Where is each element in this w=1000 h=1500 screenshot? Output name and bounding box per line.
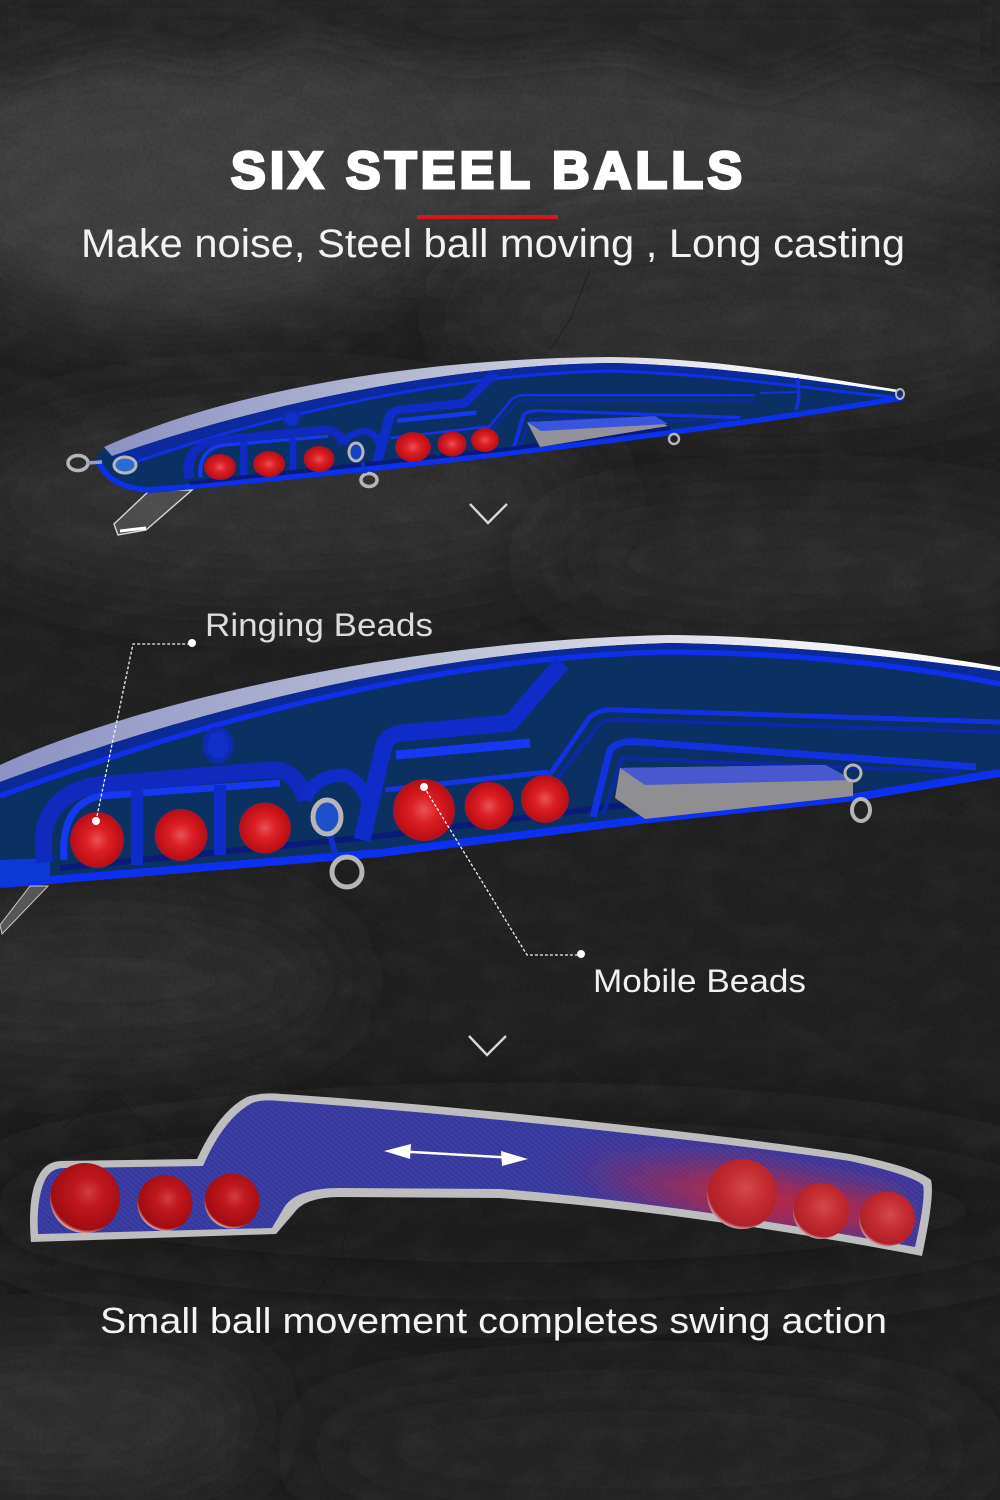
lure: enlarged cutaway: [0, 635, 1000, 934]
red motion trail: [560, 1160, 900, 1235]
internal ribs: [188, 366, 755, 480]
title: SIX STEEL BALLS: [231, 142, 742, 200]
chamber outline: [30, 1093, 932, 1256]
eyelets: [313, 765, 870, 887]
body shell: [0, 635, 1000, 886]
floor and extra ribs: [190, 378, 800, 483]
moved beads: [707, 1159, 915, 1246]
callout: ringing beads: Ringing Beads: [205, 607, 433, 643]
beads: [204, 428, 499, 480]
eyelets: [68, 389, 904, 486]
chevron arrow 2: [469, 1036, 506, 1055]
callout: mobile beads: [420, 783, 806, 999]
red title underline: [417, 215, 558, 219]
lip: [0, 886, 48, 934]
weight block: [527, 416, 668, 447]
chevron arrow 1: [470, 504, 507, 523]
lure: small full-view cutaway: [68, 357, 904, 535]
resting beads: [50, 1163, 260, 1233]
beads: [70, 775, 569, 868]
double arrow: [384, 1144, 528, 1166]
diagram: bead chamber cross-section: [30, 1093, 932, 1256]
lip: [114, 490, 192, 535]
callout: ringing beads: [92, 607, 433, 825]
internal ribs: [43, 663, 1000, 865]
caption: Small ball movement completes swing action: [100, 1300, 887, 1341]
body shell: [96, 357, 904, 493]
subtitle: Make noise, Steel ball moving , Long casting: [81, 222, 905, 266]
weight block: [615, 765, 853, 819]
callout: mobile beads: Mobile Beads: [593, 963, 806, 999]
